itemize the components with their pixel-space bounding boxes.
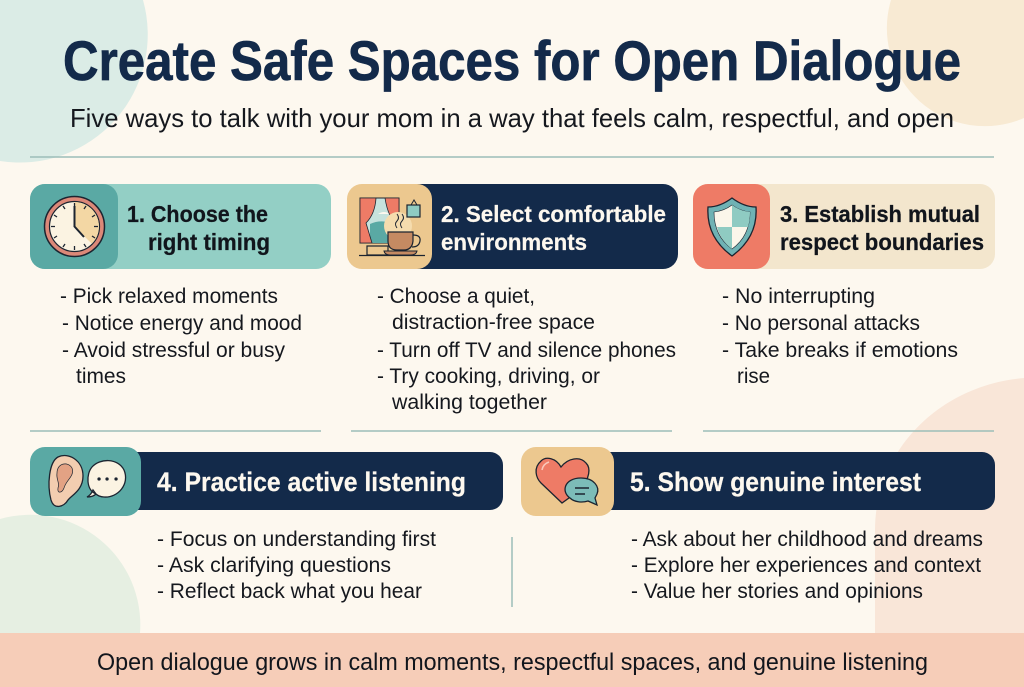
footer banner (0, 633, 1024, 687)
bullet list 5 (631, 527, 983, 603)
bullet list 4 (157, 527, 436, 603)
bullet list 5: - Explore her experiences and context (631, 553, 981, 577)
bullet list 2 (377, 284, 676, 414)
heading 3: respect boundaries (780, 229, 984, 255)
panel: step 5 (521, 447, 995, 603)
heading 1: right timing (148, 229, 270, 255)
heading 2: environments (441, 229, 587, 255)
icon: window and coffee cup (347, 184, 432, 269)
header bar 1 (30, 184, 331, 269)
bullet list 2: walking together (391, 390, 547, 414)
heading 4: 4. Practice active listening (157, 467, 466, 497)
panel: step 3 (693, 184, 995, 388)
bullet list 5: - Ask about her childhood and dreams (631, 527, 983, 551)
bullet list 1: - Avoid stressful or busy (62, 338, 285, 362)
header bar 2 (400, 184, 678, 269)
bullet list 2: - Turn off TV and silence phones (377, 338, 676, 362)
icon: shield (693, 184, 770, 269)
footer banner: Open dialogue grows in calm moments, respectful spaces, and genuine listening (97, 649, 928, 676)
bullet list 2: - Choose a quiet, (377, 284, 535, 308)
panel: step 2 (347, 184, 678, 414)
bullet list 2: distraction-free space (392, 310, 595, 334)
subtitle: Five ways to talk with your mom in a way that feels calm, respectful, and open (70, 103, 954, 133)
heading 3: 3. Establish mutual (780, 201, 980, 227)
bullet list 3: - No personal attacks (722, 311, 920, 335)
icon: clock (30, 184, 118, 269)
panel: step 1 (30, 184, 331, 388)
header bar 3 (693, 184, 995, 269)
bullet list 1: - Notice energy and mood (62, 311, 302, 335)
heading 1 (127, 201, 270, 255)
icon: ear and speech bubble (30, 447, 141, 516)
bullet list 4: - Focus on understanding first (157, 527, 436, 551)
header bar 5 (580, 452, 995, 510)
panel: step 4 (30, 447, 503, 603)
bullet list 5: - Value her stories and opinions (631, 579, 923, 603)
bullet list 1: - Pick relaxed moments (60, 284, 278, 308)
header bar 4 (100, 452, 503, 510)
bullet list 2: - Try cooking, driving, or (377, 364, 600, 388)
bullet list 4: - Reflect back what you hear (157, 579, 422, 603)
icon: heart and speech bubble (521, 447, 614, 516)
heading 2: 2. Select comfortable (441, 201, 666, 227)
heading 1: 1. Choose the (127, 201, 268, 227)
bullet list 3: - Take breaks if emotions (722, 338, 958, 362)
bullet list 1 (60, 284, 302, 388)
bullet list 3: - No interrupting (722, 284, 875, 308)
bullet list 3 (722, 284, 958, 388)
heading 2 (441, 201, 666, 255)
bullet list 1: times (76, 364, 126, 388)
bullet list 3: rise (737, 364, 770, 388)
bullet list 4: - Ask clarifying questions (157, 553, 391, 577)
heading 3 (780, 201, 984, 255)
heading 5: 5. Show genuine interest (630, 467, 921, 497)
